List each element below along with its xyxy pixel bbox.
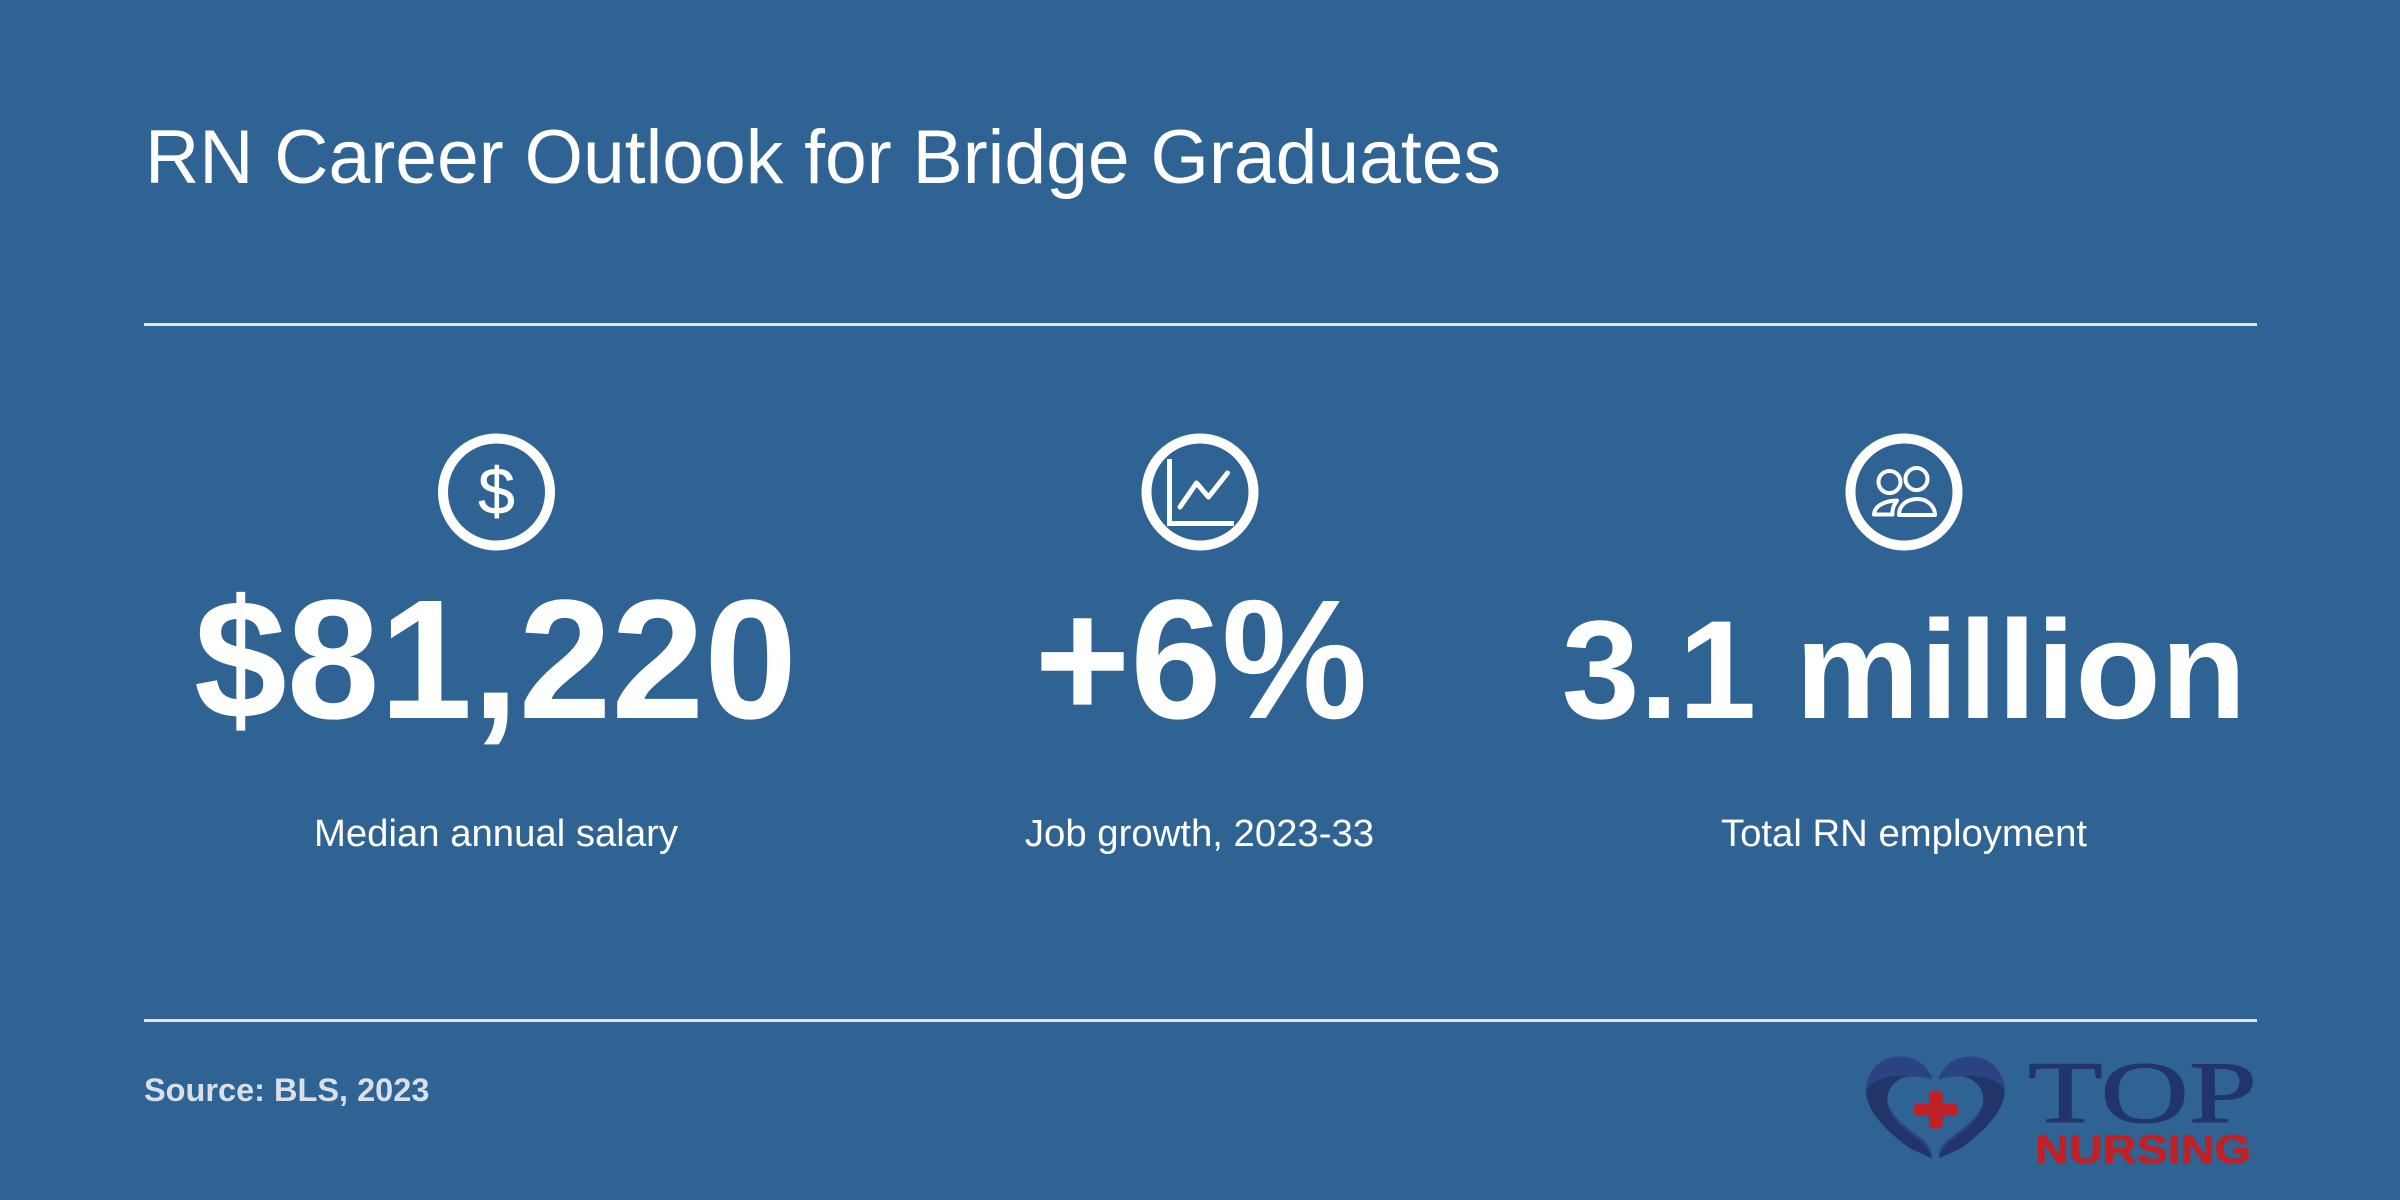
panel: median salary [194,438,797,855]
salary value: $81,220 [194,565,797,755]
panel: total employment [1562,438,2246,855]
growth value: +6% [1034,565,1368,755]
logo: Top Nursing [1866,1045,2257,1172]
icon: line chart [1146,438,1254,546]
employment value: 3.1 million [1562,591,2246,748]
logo wordmark: NURSING: NURSING [2035,1128,2251,1172]
growth label: Job growth, 2023-33 [1025,812,1374,855]
icon: dollar sign [443,438,550,546]
title: RN Career Outlook for Bridge Graduates [145,115,1501,200]
employment label: Total RN employment [1721,812,2087,855]
icon: dollar sign: $ [478,454,515,528]
icon: heart with cross [1866,1057,2005,1158]
icon: people [1850,438,1958,546]
source note: Source: BLS, 2023 [144,1072,429,1108]
logo wordmark: TOP: TOP [2028,1045,2257,1142]
panel: job growth [1025,438,1374,855]
salary label: Median annual salary [314,812,679,855]
